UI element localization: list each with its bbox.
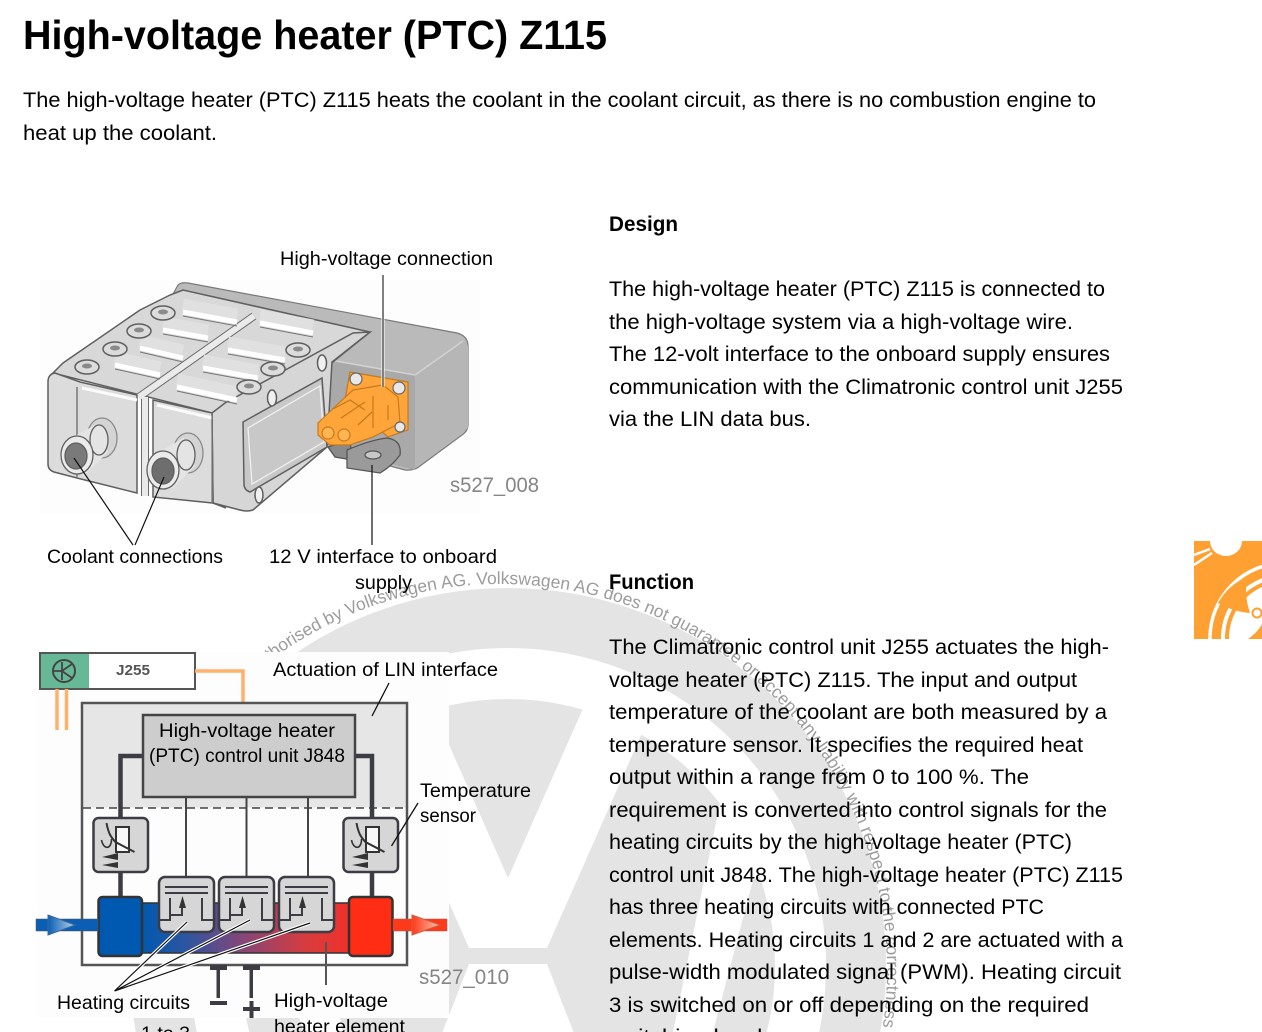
figure code s527_010: s527_010 <box>419 966 509 989</box>
side panel recess <box>243 378 327 492</box>
label: 12 V interface: 12 V interface to onboard <box>269 546 497 568</box>
label: 12 V interface <box>269 546 497 594</box>
intro text: The high-voltage heater (PTC) Z115 heats the coolant in the coolant circuit, as there is no combustion engine to <box>23 89 1096 112</box>
text block: function: temperature of the coolant are both measured by a <box>609 701 1107 724</box>
intro text <box>23 89 1096 145</box>
icon: orange sidebar logo <box>1194 541 1262 639</box>
cooling ribs <box>115 305 313 404</box>
heading: design: Design <box>609 213 678 236</box>
arrow: coolant out <box>393 915 447 935</box>
control unit J848 <box>143 715 355 797</box>
heating circuit 2 <box>219 877 274 932</box>
heating circuit 1 <box>159 877 214 932</box>
text block: function: temperature sensor. It specifies the required heat <box>609 734 1083 757</box>
heading: function: Function <box>609 571 694 594</box>
housing main block <box>48 290 370 511</box>
12 V plug <box>328 438 400 473</box>
text block: design: The 12-volt interface to the onboard supply ensures <box>609 343 1110 366</box>
orange high-voltage connector <box>318 372 408 445</box>
coolant inlet block <box>98 897 142 956</box>
label: high-voltage heater element <box>274 990 406 1032</box>
text block: design: the high-voltage system via a high-voltage wire. <box>609 311 1073 334</box>
text block: design <box>609 278 1123 431</box>
mounting bosses <box>75 306 326 503</box>
intro text: heat up the coolant. <box>23 122 217 145</box>
label: temperature sensor: Temperature <box>420 780 531 802</box>
text block: design: communication with the Climatronic control unit J255 <box>609 376 1123 399</box>
figure code s527_008: s527_008 <box>450 474 539 497</box>
control unit J848: High-voltage heater <box>159 720 336 742</box>
text block: function: elements. Heating circuits 1 and 2 are actuated with a <box>609 929 1123 952</box>
leader: LIN <box>372 683 389 716</box>
leader lines <box>382 275 384 387</box>
text block: function: heating circuits by the high-voltage heater (PTC) <box>609 831 1072 854</box>
text block: function: voltage heater (PTC) Z115. The input and output <box>609 669 1077 692</box>
text block: function: requirement is converted into control signals for the <box>609 799 1107 822</box>
text block: function <box>609 636 1123 1032</box>
title: High-voltage heater (PTC) Z115 <box>23 12 607 58</box>
coolant outlet block <box>349 897 392 956</box>
text block: design: via the LIN data bus. <box>609 408 811 431</box>
label: high-voltage heater element: High-voltage <box>274 990 388 1012</box>
label: temperature sensor: sensor <box>420 805 476 827</box>
control unit J848: (PTC) control unit J848 <box>149 745 345 767</box>
text block: function: 3 is switched on or off depending on the required <box>609 994 1089 1017</box>
central divider <box>139 316 254 496</box>
label: 12 V interface: supply <box>355 572 412 594</box>
label: actuation of LIN interface: Actuation of LIN interface <box>273 659 498 681</box>
text block: function: The Climatronic control unit J255 actuates the high- <box>609 636 1109 659</box>
leader: heating circuits <box>114 920 310 991</box>
temperature sensor right <box>344 818 398 872</box>
leader: temperature sensor <box>392 803 418 846</box>
text block: function: output within a range from 0 to 100 %. The <box>609 766 1029 789</box>
text block: function: has three heating circuits with connected PTC <box>609 896 1044 919</box>
heater element gradient <box>142 903 349 953</box>
text block: function: control unit J848. The high-voltage heater (PTC) Z115 <box>609 864 1123 887</box>
leader: heater element <box>325 942 327 985</box>
label: heating circuits <box>57 992 190 1032</box>
wires <box>120 756 372 897</box>
label: coolant connections: Coolant connections <box>47 546 223 568</box>
label: temperature sensor <box>420 780 531 827</box>
coolant ports <box>61 418 203 489</box>
heater enclosure <box>82 703 407 965</box>
LIN wires <box>57 671 243 730</box>
heating circuit 3 <box>279 877 334 932</box>
terminals <box>210 965 260 1018</box>
label: heating circuits: Heating circuits <box>57 992 190 1014</box>
temperature sensor left <box>94 818 148 872</box>
arrow: coolant in <box>36 915 98 935</box>
text block: design: The high-voltage heater (PTC) Z115 is connected to <box>609 278 1105 301</box>
diagram: heater circuit <box>36 652 449 1018</box>
label: high-voltage connection: High-voltage connection <box>280 248 493 270</box>
watermark: Volkswagen logo <box>134 571 898 1032</box>
diagram: heater exterior <box>40 275 480 545</box>
text block: function: pulse-width modulated signal (PWM). Heating circuit <box>609 961 1121 984</box>
housing rear block <box>172 283 468 470</box>
J255 control unit: J255 <box>116 662 150 679</box>
J255 control unit <box>40 653 195 689</box>
